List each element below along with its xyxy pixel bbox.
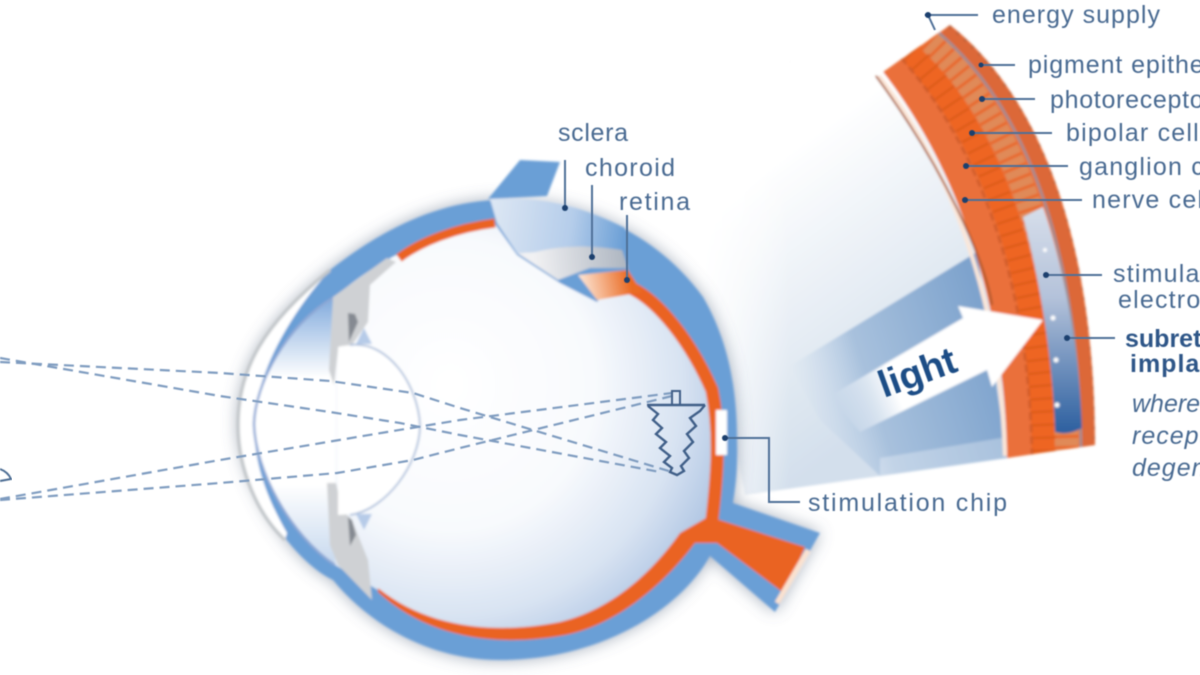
label: light: light [873,339,963,406]
lens [338,328,420,530]
labels: eye anatomy: choroid [585,154,675,182]
cut layer: retina [578,270,642,300]
labels: eye anatomy: sclera [558,119,628,147]
iris upper notch [348,313,358,342]
cornea [238,270,330,540]
icon: object at left edge [0,469,11,481]
eye drop shadow [238,200,820,660]
arrow: light [830,306,1043,432]
retina upper segment [399,223,495,258]
iris upper [329,258,396,385]
white fade at left of cone [690,60,790,505]
callout: subretinal implant [1125,325,1200,482]
subretinal implant [1023,207,1082,433]
eye cross-section [238,160,820,660]
retina lower segment and optic nerve [378,518,805,640]
labels: retina layers [992,1,1200,314]
panel: magnified retina cross-section [735,23,1097,495]
dashed light rays [0,358,672,500]
retina right segment [612,283,717,520]
iris lower notch [348,517,356,546]
sclera wedge at cut [488,160,560,199]
blue light wedge [790,252,1007,476]
light cone from eye to detail [695,72,1007,495]
nerve fibre layer edge [879,76,1005,456]
retina layer band [883,25,1095,460]
icon: inverted object on retina [647,391,705,475]
cut layer: sclera [490,198,625,253]
stimulation chip [716,410,727,455]
labels: retina layers: energy supply [992,1,1160,29]
labels: eye anatomy: stimulation chip [808,489,1007,517]
labels: eye anatomy [558,119,1007,517]
leader dots [562,12,1070,441]
callout: subretinal implant: where [1132,390,1200,418]
cornea inner line [254,297,335,565]
anterior chamber [254,297,335,565]
pale lower stripe of wedge [880,437,1007,476]
leader lines [565,15,1115,502]
cut layer: choroid [517,246,628,280]
labels: eye anatomy: retina [619,188,690,216]
nerve end [777,550,808,603]
iris lower [327,483,372,600]
vitreous interior [254,224,717,633]
sclera [238,200,820,660]
